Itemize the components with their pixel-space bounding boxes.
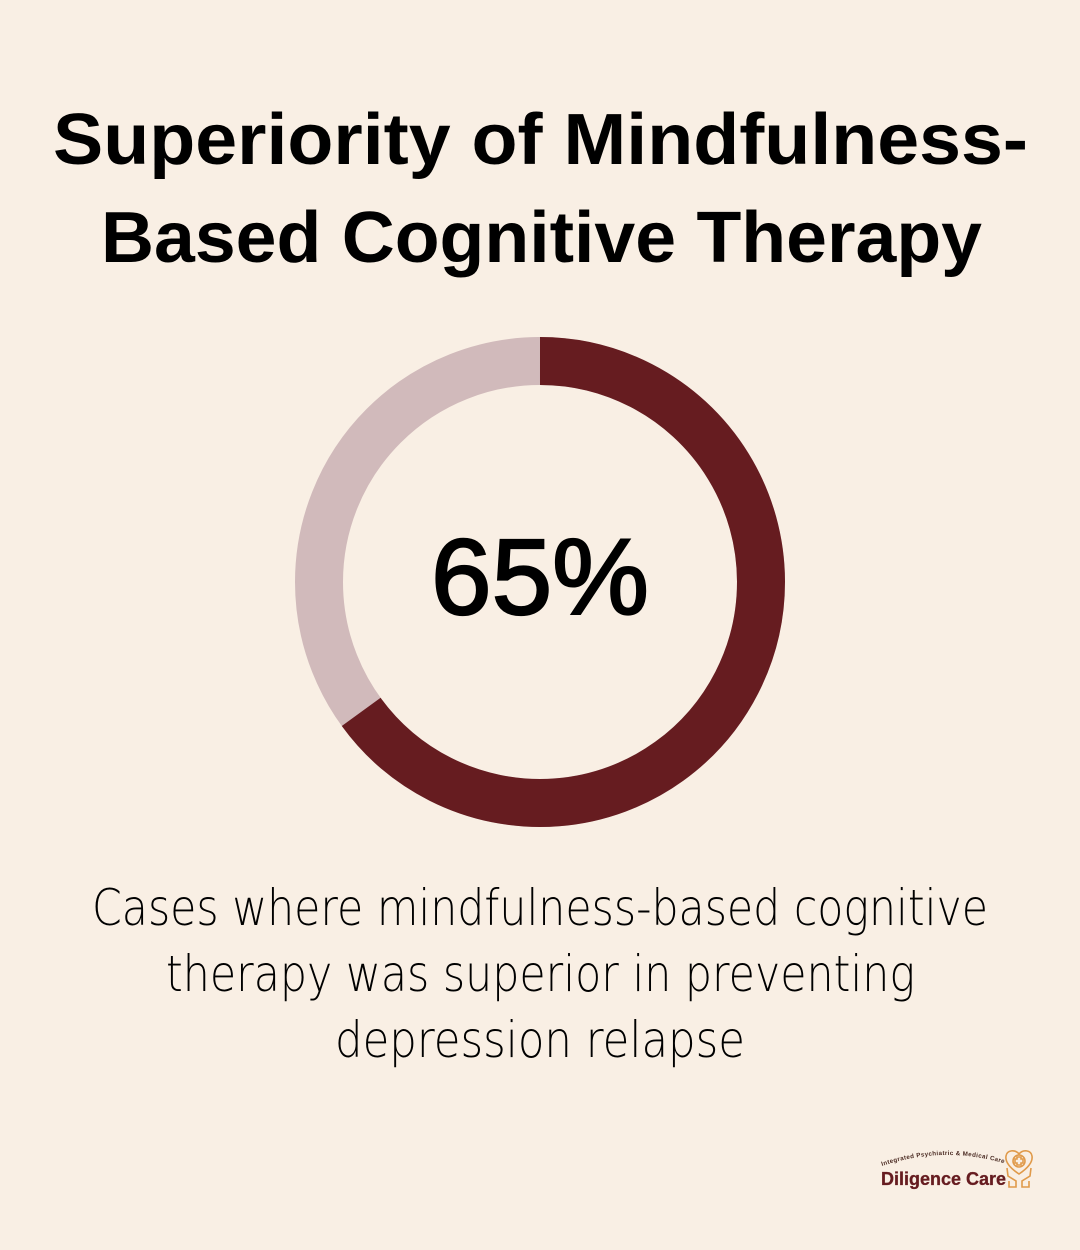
donut chart: 65% bbox=[319, 361, 761, 803]
icon: heart in caring hands bbox=[1006, 1151, 1032, 1187]
logo wordmark: Diligence Care bbox=[881, 1169, 1006, 1189]
description text bbox=[92, 879, 988, 1069]
title: Superiority of Mindfulness- bbox=[53, 100, 1028, 180]
logo: Diligence Care bbox=[881, 1150, 1033, 1190]
description text: therapy was superior in preventing bbox=[166, 945, 915, 1003]
description text: depression relapse bbox=[335, 1011, 745, 1069]
logo tagline: Integrated Psychiatric & Medical Care bbox=[881, 1150, 1004, 1166]
title: Based Cognitive Therapy bbox=[101, 198, 982, 278]
title bbox=[53, 100, 1028, 278]
donut value: 65% bbox=[431, 516, 649, 637]
